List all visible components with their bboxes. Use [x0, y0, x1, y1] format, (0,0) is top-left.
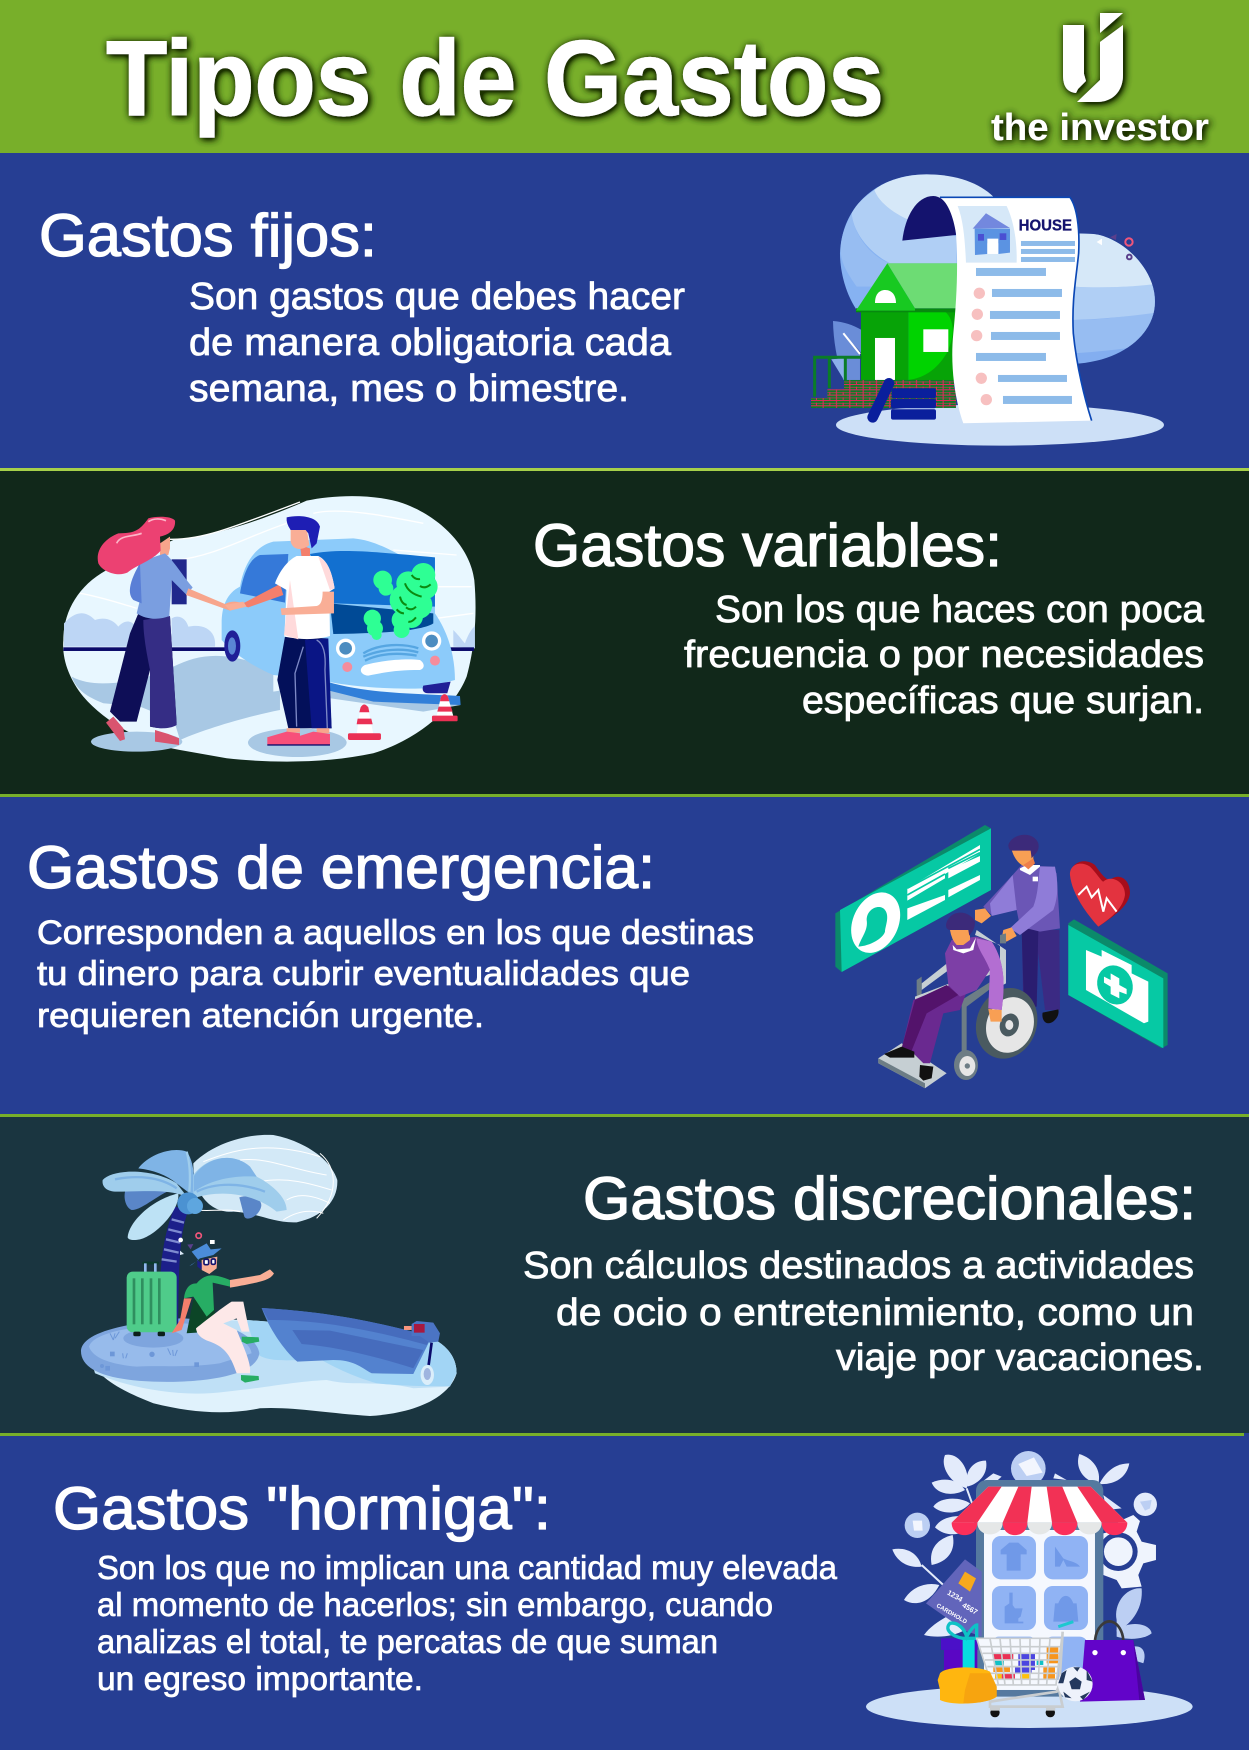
- card: patient profile: [835, 825, 991, 972]
- traveller: [172, 1233, 274, 1383]
- text: gastos discrecionales: de ocio o entretenimiento, como un: [556, 1292, 1194, 1334]
- text: gastos variables: Son los que haces con poca: [715, 589, 1205, 631]
- text: gastos hormiga: [97, 1549, 838, 1697]
- logo: the investor: [991, 13, 1209, 149]
- caregiver: [975, 835, 1060, 1023]
- soccer ball: [1058, 1667, 1093, 1701]
- credit card: CARDHOLD: [935, 1603, 968, 1626]
- illustration: car purchase handshake: [63, 496, 476, 762]
- text: gastos fijos: [189, 276, 685, 410]
- man: [240, 516, 335, 746]
- illustration: wheelchair and medical icons: [835, 825, 1168, 1088]
- document: HOUSE: [1019, 218, 1072, 235]
- header band: [0, 0, 1249, 153]
- text: gastos de emergencia: Corresponden a aquellos en los que destinas: [37, 914, 754, 952]
- logo: the investor: the investor: [991, 107, 1209, 149]
- patient: [884, 913, 1004, 1081]
- suitcase: [127, 1262, 177, 1336]
- text: gastos fijos: de manera obligatoria cada: [189, 322, 672, 364]
- text: gastos discrecionales: [523, 1245, 1204, 1379]
- decorative leaves and icons: [892, 1451, 1157, 1663]
- cloud: [193, 1135, 337, 1222]
- text: gastos discrecionales: viaje por vacaciones.: [836, 1337, 1204, 1379]
- smoke: [364, 563, 438, 640]
- document: [940, 197, 1092, 423]
- text: gastos fijos: Son gastos que debes hacer: [189, 276, 685, 318]
- text: gastos de emergencia: [37, 914, 754, 1035]
- heading: gastos discrecionales: Gastos discrecionales:: [583, 1165, 1196, 1232]
- heading: gastos variables: Gastos variables:: [533, 512, 1002, 579]
- text: gastos hormiga: Son los que no implican una cantidad muy elevada: [97, 1549, 838, 1586]
- woman: [98, 517, 243, 745]
- boat: [262, 1308, 440, 1385]
- panel: gastos hormiga: [0, 1436, 1249, 1750]
- credit card: 4567: [961, 1601, 979, 1617]
- shopping cart: [977, 1622, 1073, 1717]
- text: gastos de emergencia: requieren atención urgente.: [37, 997, 484, 1035]
- coin stack: [938, 1667, 997, 1704]
- panel: gastos fijos: [0, 153, 1249, 471]
- card: first aid: [1068, 919, 1168, 1048]
- text: gastos fijos: semana, mes o bimestre.: [189, 368, 629, 410]
- palm tree: [103, 1150, 287, 1327]
- awning: [952, 1487, 1127, 1535]
- heading: gastos hormiga: Gastos "hormiga":: [53, 1475, 551, 1542]
- house: [811, 263, 958, 408]
- panel: gastos de emergencia: [0, 797, 1249, 1117]
- illustration: online shop: [866, 1451, 1193, 1728]
- purple bag: [1080, 1621, 1145, 1702]
- text: gastos variables: específicas que surjan.: [802, 680, 1204, 722]
- text: gastos de emergencia: tu dinero para cubrir eventualidades que: [37, 955, 690, 993]
- illustration: house and document: [811, 174, 1164, 446]
- text: gastos hormiga: un egreso importante.: [97, 1660, 423, 1697]
- phone storefront: [976, 1480, 1103, 1697]
- wheelchair: [878, 930, 1047, 1088]
- gift box: [941, 1623, 978, 1670]
- cones: [348, 694, 458, 740]
- illustration: beach vacation: [81, 1135, 457, 1416]
- panel: gastos discrecionales: [0, 1117, 1249, 1436]
- text: gastos hormiga: al momento de hacerlos; sin embargo, cuando: [97, 1586, 773, 1623]
- title: Tipos de Gastos: [106, 18, 884, 138]
- car: [222, 538, 461, 705]
- panel: gastos variables: [0, 471, 1249, 797]
- text: gastos variables: frecuencia o por necesidades: [684, 634, 1204, 676]
- text: gastos hormiga: analizas el total, te percatas de que suman: [97, 1623, 718, 1660]
- credit card: [926, 1559, 982, 1637]
- heading: gastos de emergencia: Gastos de emergencia:: [27, 834, 655, 901]
- heading: gastos fijos: Gastos fijos:: [39, 202, 377, 269]
- credit card: 1234: [946, 1588, 965, 1604]
- water and island: [90, 1319, 457, 1416]
- text: gastos discrecionales: Son cálculos destinados a actividades: [523, 1245, 1194, 1287]
- heart: [1070, 861, 1130, 927]
- text: gastos variables: [684, 589, 1205, 722]
